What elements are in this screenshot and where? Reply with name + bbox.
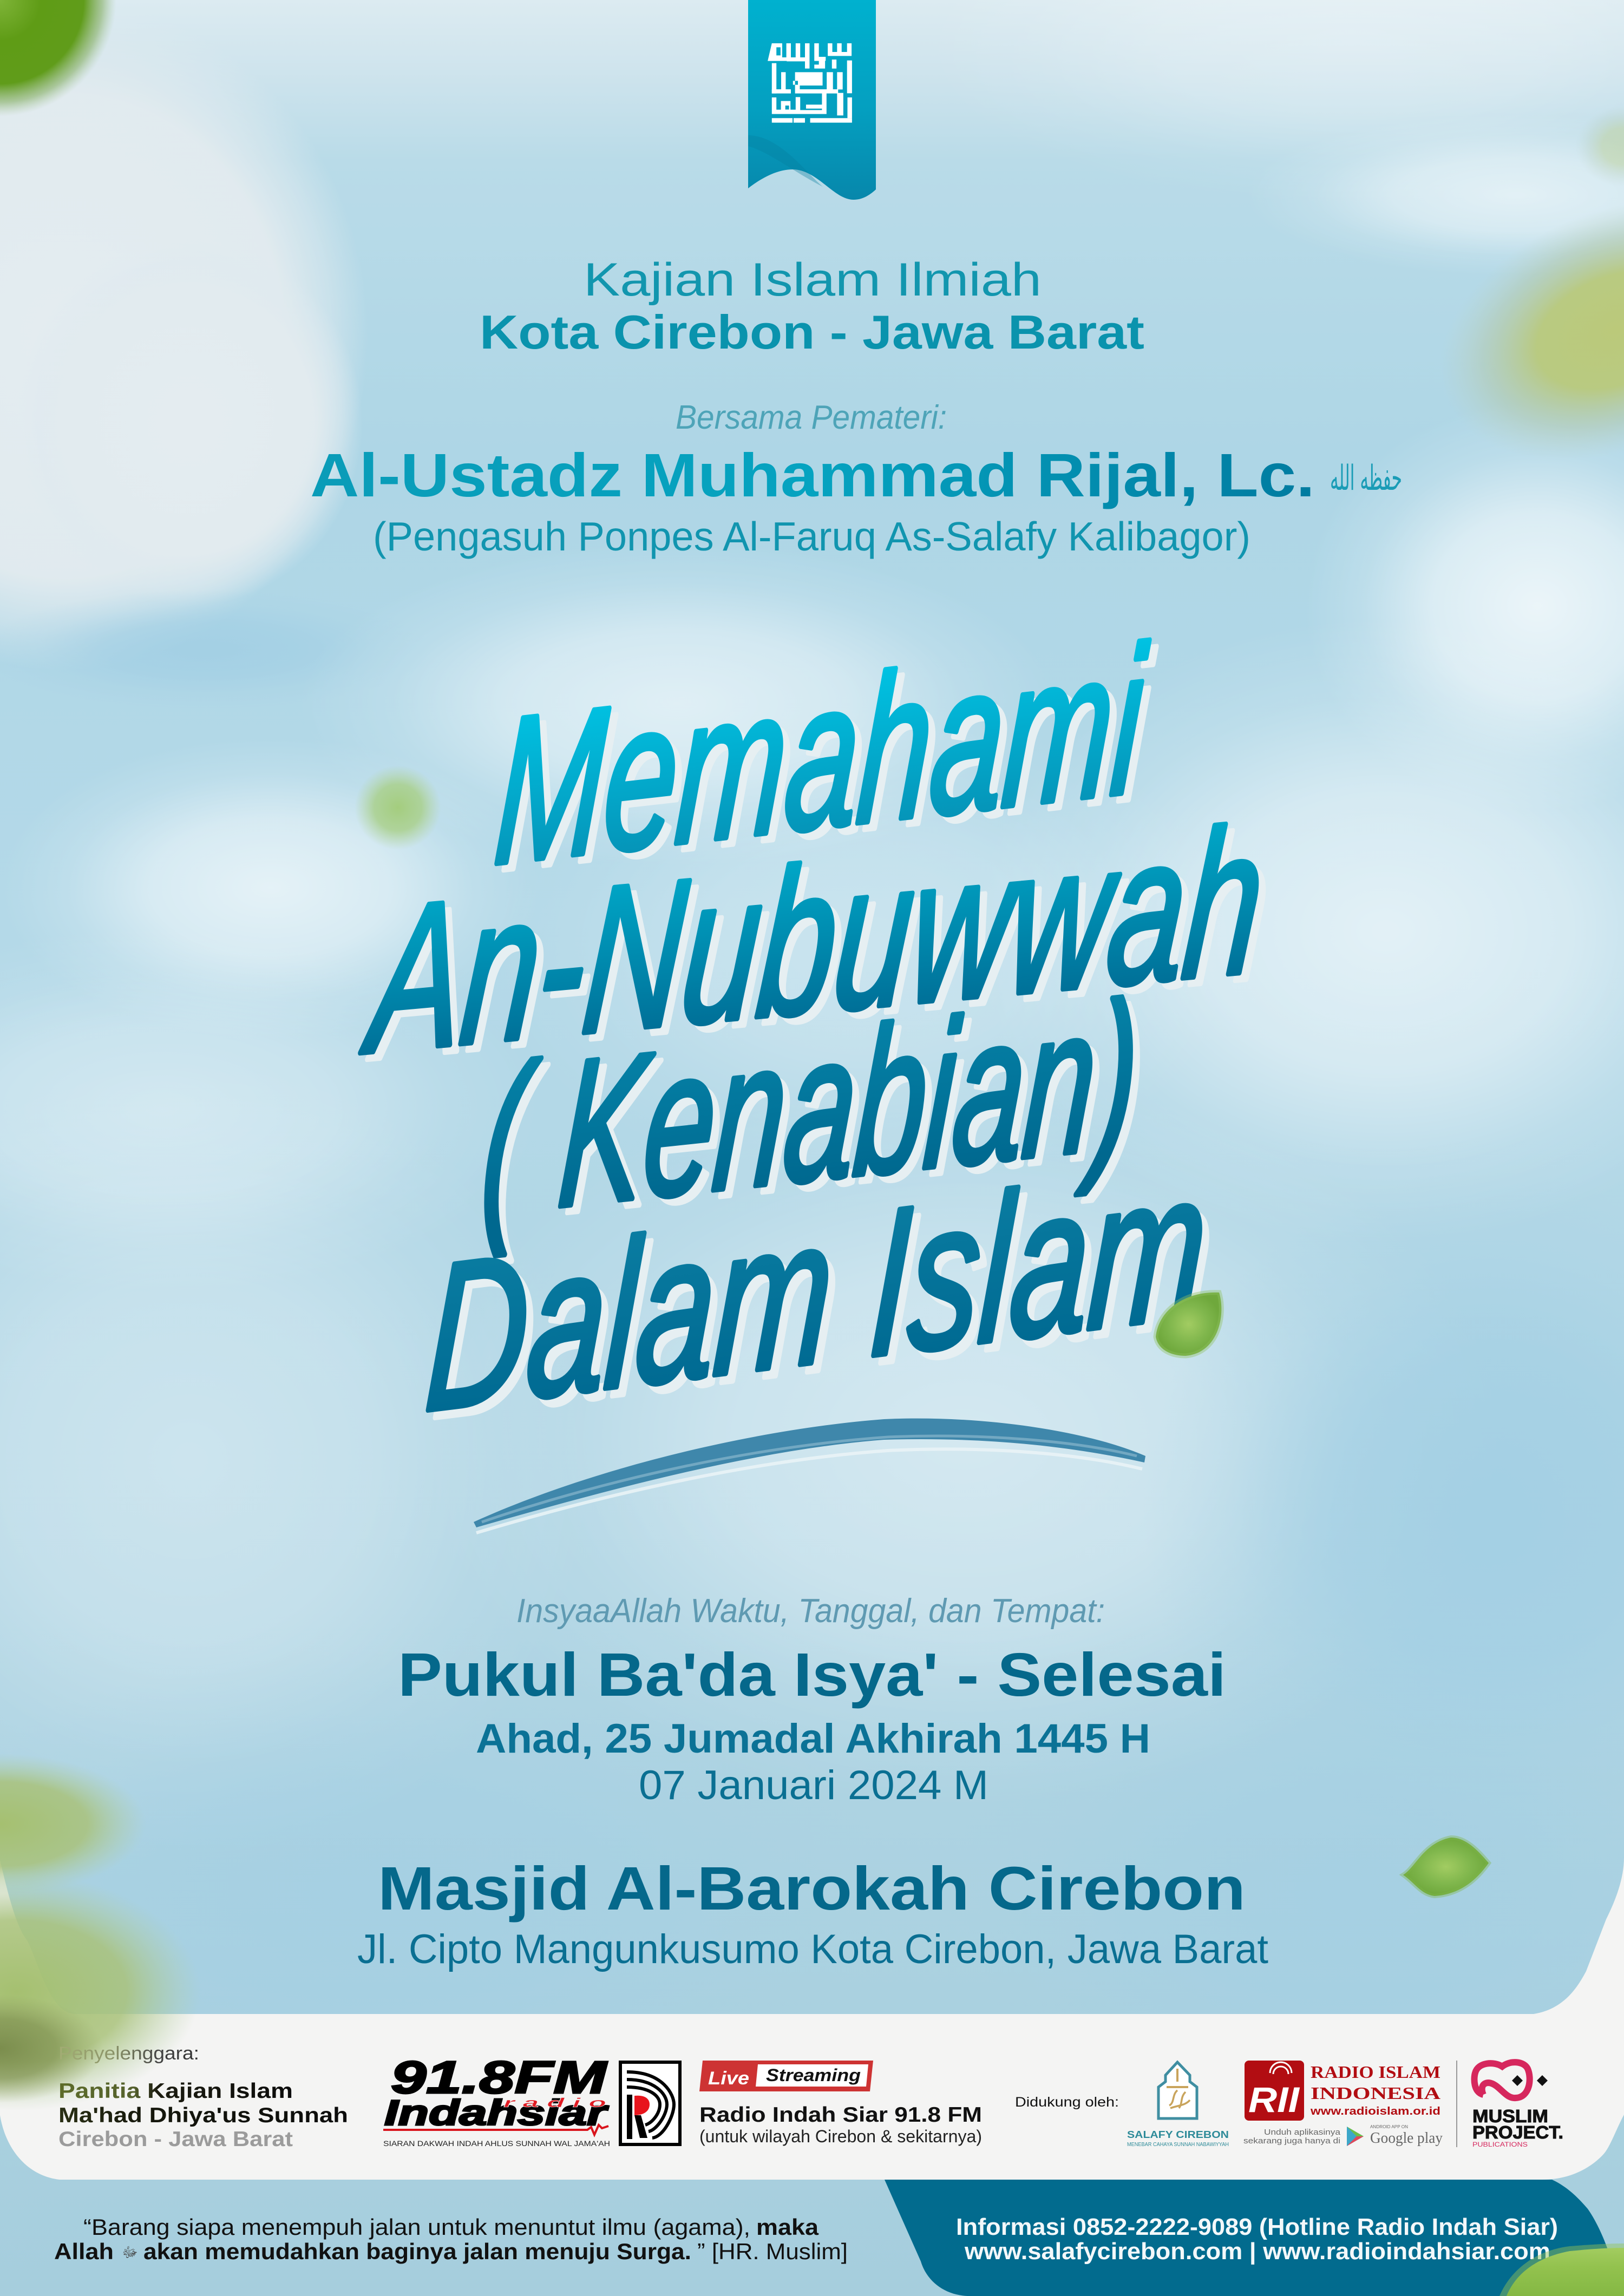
logo: muslim project: MUSLIM [1472, 2106, 1548, 2126]
text: address: Jl. Cipto Mangunkusumo Kota Cirebon, Jawa Barat [357, 1926, 1268, 1972]
title shadow: ( Kenabian) [482, 964, 1153, 1267]
logo: radio islam indonesia: Unduh aplikasinya [1264, 2128, 1341, 2137]
logo: salafy cirebon [1127, 2062, 1229, 2148]
leaf lower-left olive [0, 1873, 200, 2111]
organizer text [58, 2043, 348, 2151]
leaf over title [1156, 1293, 1221, 1356]
logo: radio indah siar [383, 2052, 610, 2148]
ribbon with kufic bismillah [748, 0, 876, 200]
text: organizer label: Penyelenggara: [58, 2043, 199, 2064]
text: organizer line 3: Cirebon - Jawa Barat [58, 2128, 293, 2151]
details block [357, 1592, 1268, 1972]
text: contact hotline: Informasi 0852-2222-9089 (Hotline Radio Indah Siar) [956, 2214, 1558, 2240]
text: event title: Kajian Islam Ilmiah [584, 254, 1042, 306]
title shadow: Dalam Islam [428, 1134, 1219, 1463]
hadith quote: ﷻ [122, 2245, 138, 2261]
logo: radio islam indonesia [1243, 2061, 1443, 2147]
title shadow: Memahami [496, 609, 1160, 915]
logo: radio islam indonesia: RII [1248, 2079, 1300, 2120]
hadith quote: ” [HR. Muslim] [697, 2239, 848, 2264]
hadith quote: Allah [54, 2239, 114, 2264]
hadith quote: akan memudahkan baginya jalan menuju Surga. [143, 2239, 691, 2264]
brush stroke underline [474, 1419, 1145, 1533]
hadith quote: maka [756, 2214, 819, 2240]
text: radio coverage: (untuk wilayah Cirebon & sekitarnya) [699, 2127, 982, 2146]
logo: salafy cirebon: SALAFY CIREBON [1127, 2129, 1229, 2140]
text: حفظه الله [1330, 458, 1402, 498]
logo: radio islam indonesia: INDONESIA [1311, 2083, 1440, 2103]
leaf right edge [1575, 106, 1624, 187]
leaf bottom-right [1499, 2243, 1624, 2296]
footer white panel [0, 1858, 1624, 2180]
text: hijri date: Ahad, 25 Jumadal Akhirah 1445 H [476, 1716, 1150, 1762]
title line: Dalam Islam: Dalam Islam [421, 1126, 1212, 1455]
text: organizer line 2: Ma'had Dhiya'us Sunnah [58, 2104, 348, 2127]
leaf lower right [1403, 1838, 1489, 1896]
title line: Memahami: Memahami [489, 603, 1153, 908]
text: supported by: Didukung oleh: [1015, 2095, 1119, 2110]
logo: muslim project: PUBLICATIONS [1472, 2141, 1528, 2148]
leaf top-left [0, 0, 116, 116]
title shadow [361, 609, 1279, 1463]
live streaming badge: Live [708, 2068, 749, 2089]
logo: radio islam indonesia: www.radioislam.or.id [1310, 2105, 1440, 2117]
logo: radio indah siar: Indahsiar [384, 2092, 609, 2133]
leaf lower-left dark core [0, 1995, 103, 2103]
logo divider [1456, 2061, 1457, 2147]
logo: radio indah siar: 91.8FM [391, 2052, 608, 2103]
live streaming badge: Streaming [766, 2065, 861, 2085]
hadith quote: “Barang siapa menempuh jalan untuk menuntut ilmu (agama), [83, 2214, 750, 2240]
logo: radio indah siar: SIARAN DAKWAH INDAH AHLUS SUNNAH WAL JAMA'AH [383, 2139, 610, 2148]
logo: radio islam indonesia: ANDROID APP ON [1370, 2124, 1408, 2129]
text: venue: Masjid Al-Barokah Cirebon [378, 1854, 1246, 1923]
text: radio station: Radio Indah Siar 91.8 FM [699, 2103, 982, 2127]
logo: muslim project [1472, 2062, 1563, 2148]
logo: muslim project: PROJECT. [1472, 2122, 1563, 2142]
title line: (Kenabian): ( Kenabian) [475, 957, 1146, 1260]
text: websites: www.salafycirebon.com | www.radioindahsiar.com [964, 2238, 1550, 2265]
logo: salafy cirebon: MENEBAR CAHAYA SUNNAH NABAWIYYAH [1127, 2142, 1229, 2148]
leaf top-right [1400, 151, 1624, 509]
icon: kufic calligraphy [768, 43, 852, 123]
leaf lower-left upper blob [0, 1754, 146, 1894]
logo: R emblem [620, 2062, 680, 2144]
logo: radio indah siar: r a d i o [503, 2096, 606, 2110]
main title [354, 603, 1279, 1463]
contact panel [885, 2180, 1624, 2296]
logo: radio islam indonesia: Google play [1370, 2130, 1443, 2147]
text: presenter name: Al-Ustadz Muhammad Rijal, Lc. [310, 441, 1315, 509]
text: location: Kota Cirebon - Jawa Barat [480, 305, 1144, 359]
text: presenter affiliation: (Pengasuh Ponpes Al-Faruq As-Salafy Kalibagor) [373, 514, 1250, 559]
text: presenter label: Bersama Pemateri: [676, 399, 947, 436]
logo: radio islam indonesia: RADIO ISLAM [1311, 2062, 1440, 2082]
text: schedule label: InsyaaAllah Waktu, Tanggal, dan Tempat: [516, 1592, 1105, 1630]
text: gregorian date: 07 Januari 2024 M [639, 1762, 988, 1808]
text: organizer line 1: Panitia Kajian Islam [58, 2079, 293, 2103]
live streaming badge [699, 2061, 873, 2091]
hadith quote [54, 2214, 848, 2264]
header block [310, 254, 1402, 559]
logo: radio islam indonesia: sekarang juga hanya di [1243, 2136, 1340, 2146]
center blurred leaf [355, 765, 441, 850]
text: time: Pukul Ba'da Isya' - Selesai [398, 1641, 1226, 1709]
